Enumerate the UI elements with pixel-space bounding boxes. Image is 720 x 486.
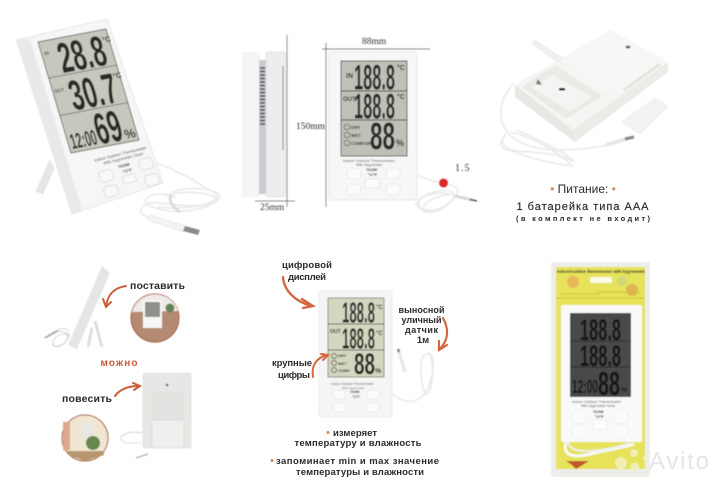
LCD screen: WET <box>338 361 347 366</box>
LCD screen: °C <box>376 331 383 337</box>
side view of device <box>242 52 286 197</box>
watermark text: Avito <box>649 448 709 475</box>
label: 25mm: 25mm <box>260 203 285 213</box>
device label and buttons: Indoor Outdoor Thermometer <box>93 145 148 163</box>
text: battery note: (в комплект не входит) <box>516 214 650 223</box>
panel: angled thermometer photo <box>16 19 220 235</box>
LCD screen: OUT <box>343 97 356 103</box>
text: feature one: измеряет <box>333 428 377 439</box>
LCD screen: 188.8 <box>354 58 395 98</box>
watermark: Avito <box>615 448 709 475</box>
cable at bottom of pack <box>565 442 634 469</box>
LCD screen: 88 <box>598 365 620 402</box>
label: large digits: крупные <box>272 358 312 369</box>
label: allowed: можно <box>100 358 138 369</box>
LCD screen: 188.8 <box>354 88 395 126</box>
LCD screen: °C <box>397 93 405 101</box>
LCD screen: % <box>621 387 628 394</box>
LCD screen: 88 <box>354 348 375 381</box>
device label and buttons: Indoor Outdoor Thermometer <box>572 400 622 404</box>
text: feature two line two: температуры и влажности <box>296 467 424 478</box>
LCD screen: % <box>375 368 382 375</box>
LCD screen: 188.8 <box>580 314 621 347</box>
LCD screen: °C <box>397 64 405 72</box>
LCD screen: DRY <box>338 353 347 358</box>
device label and buttons: °C/°F <box>368 173 378 177</box>
text: battery type: 1 батарейка типа ААА <box>516 201 649 213</box>
LCD screen: 69 <box>88 102 128 154</box>
panel: battery compartment photo <box>501 30 668 166</box>
label: 150mm: 150mm <box>296 122 326 132</box>
device label and buttons: Indoor Outdoor Thermometer <box>331 382 375 386</box>
LCD screen: OUT <box>53 87 65 95</box>
device body <box>16 19 163 214</box>
back of device <box>121 373 191 458</box>
device label and buttons: °C/°F <box>352 395 360 399</box>
device label and buttons: °C/°F <box>122 167 133 174</box>
cable <box>141 163 220 235</box>
standing device side view <box>44 266 110 349</box>
label: stand: поставить <box>130 280 186 292</box>
device front <box>561 305 642 442</box>
arrow to digits <box>313 354 328 377</box>
device label and buttons <box>343 158 400 195</box>
arrow to back of device <box>115 383 140 396</box>
panel: placement options <box>44 266 191 461</box>
LCD screen: WET <box>351 133 361 138</box>
arrow to sensor <box>439 318 447 350</box>
LCD screen: 12:00 <box>572 377 598 397</box>
LCD screen <box>570 313 631 402</box>
device front <box>319 291 392 417</box>
bullet two <box>270 459 274 462</box>
round photo: on table <box>131 294 179 342</box>
cable <box>501 83 634 166</box>
device back <box>515 30 668 142</box>
device label and buttons: With Hygrometer <box>356 163 383 167</box>
package title: Indoor/outdoor thermometer with hygrometer <box>557 269 645 274</box>
device label and buttons: °C/°F <box>595 415 604 419</box>
label: hang: повесить <box>62 393 113 405</box>
LCD screen: COMFORT <box>351 141 374 146</box>
label: 88mm: 88mm <box>362 37 387 47</box>
yellow card <box>556 267 645 469</box>
device label and buttons: TA268 <box>350 390 360 394</box>
text: feature two: запоминает min и max значение <box>276 456 439 467</box>
device label and buttons <box>93 144 161 198</box>
dimension lines <box>255 35 430 207</box>
label: outdoor sensor line three: датчик <box>405 325 438 335</box>
cable with red marker <box>416 174 477 212</box>
device label and buttons: Indoor Outdoor Thermometer <box>343 158 396 163</box>
label: display line two: дисплей <box>288 272 326 283</box>
card decoration <box>556 276 644 298</box>
LCD screen: % <box>122 125 137 142</box>
panel: feature callouts <box>270 260 447 478</box>
cable with probe <box>392 349 433 401</box>
LCD screen: 188.8 <box>580 340 621 373</box>
stand leg <box>36 160 54 194</box>
LCD screen: OUT <box>330 329 341 335</box>
watermark dots <box>615 449 648 472</box>
device label and buttons: With Hygrometer Clock <box>581 404 615 408</box>
label: outdoor sensor: выносной <box>398 305 444 315</box>
LCD screen: °C <box>101 34 112 45</box>
device label and buttons: TA268 <box>366 168 377 172</box>
device label and buttons: With Hygrometer <box>342 386 365 390</box>
label: outdoor sensor line two: уличный <box>402 315 442 325</box>
LCD screen: IN <box>346 73 353 80</box>
LCD screen: 30.7 <box>63 66 123 120</box>
LCD screen <box>328 298 384 381</box>
device label and buttons <box>572 400 628 438</box>
LCD screen: IN <box>44 50 51 57</box>
device front <box>329 52 417 200</box>
text: feature one line two: температуру и влажность <box>294 438 422 449</box>
battery cover <box>622 98 668 134</box>
arrow to display <box>283 277 313 308</box>
LCD screen: 28.8 <box>52 28 112 83</box>
label: digital display: цифровой <box>282 260 332 271</box>
panel: blister package <box>551 262 650 477</box>
device label and buttons <box>331 382 379 412</box>
LCD screen: 88 <box>370 116 395 158</box>
text: power heading: • Питание: • <box>550 182 616 196</box>
LCD screen <box>37 26 143 160</box>
LCD screen: DRY <box>351 125 360 130</box>
LCD screen: 188.8 <box>342 324 375 356</box>
device label and buttons: TA268 <box>117 161 131 169</box>
LCD screen: 12:00 <box>67 125 100 154</box>
LCD screen: COMF <box>338 368 350 373</box>
LCD screen: °C <box>112 70 123 81</box>
LCD screen: 188.8 <box>342 298 375 330</box>
label: cable length: 1.5 <box>455 163 470 174</box>
bullet one <box>326 431 330 434</box>
label: sensor length: 1м <box>417 335 429 346</box>
LCD screen: °C <box>376 305 383 311</box>
device label and buttons: With Hygrometer Clock <box>103 151 144 166</box>
round photo: on wall <box>62 415 108 461</box>
label: large digits line two: цифры <box>278 370 310 381</box>
arrow to standing device <box>103 286 126 307</box>
panel: dimensions drawing <box>242 35 477 213</box>
device label and buttons: TA268 <box>593 410 604 414</box>
LCD screen <box>341 58 407 158</box>
package shell <box>551 262 650 477</box>
LCD screen: % <box>396 138 404 148</box>
